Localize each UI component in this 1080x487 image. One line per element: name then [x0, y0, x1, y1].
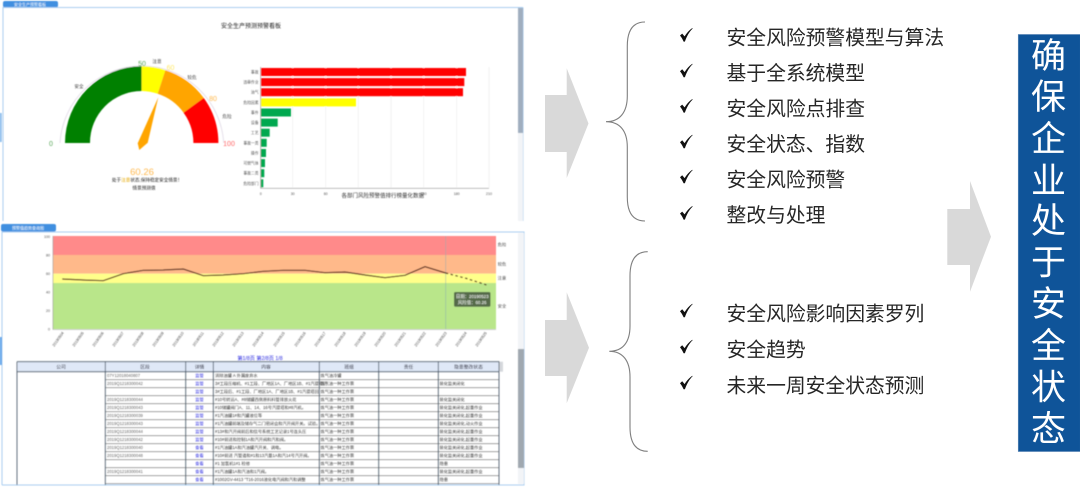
- actual risk line: [62, 267, 446, 281]
- gauge scale numbers: 80: [209, 96, 217, 103]
- callout: conclusion banner: [1018, 34, 1080, 452]
- panel: safety forecast dashboard screenshot: [0, 1, 523, 221]
- zone labels: 较危: [498, 260, 506, 268]
- forecast dashed line: [446, 273, 487, 285]
- table team column: 炼气油冷罐: [320, 372, 342, 379]
- table id column: 2019Q1218300042: [107, 437, 144, 442]
- table detail links: 查看: [195, 468, 204, 475]
- bar category labels: 事故二类: [243, 171, 259, 176]
- gauge zone labels: [74, 58, 232, 120]
- callout: conclusion banner: 于: [1031, 244, 1066, 282]
- gauge status text: 处于注意状态,保持稳定安全情景！: [112, 176, 182, 184]
- table id column: 07Y12018040807: [107, 373, 141, 378]
- table header: [56, 364, 483, 370]
- x axis dates: 20190504: [52, 331, 65, 347]
- list: top capabilities: [680, 28, 944, 227]
- chart: risk gauge: [49, 58, 235, 192]
- table detail links: [195, 372, 204, 483]
- table pagination link: 第1/8页 第2/8页 1/8: [237, 354, 283, 362]
- brace: bottom list: [609, 252, 648, 451]
- bar category labels: 危险因素: [243, 100, 259, 105]
- x axis dates: 20190510: [172, 331, 185, 347]
- bar category labels: 事故一类: [243, 140, 259, 145]
- callout: conclusion banner: 状: [1031, 368, 1066, 408]
- table content column: #1汽油罐前端及储存气二门密闭会和汽开阀开关。试验。: [215, 420, 320, 427]
- table id column: 2019Q1218300041: [107, 469, 144, 474]
- table content column: #1汽油罐1A和汽油和1汽阀。: [215, 468, 269, 475]
- arrow: bottom panel to list: [545, 292, 589, 403]
- callout: conclusion banner: 确: [1031, 37, 1066, 76]
- brace: top list: [606, 22, 645, 221]
- table content column: 消除油罐 A 外漏废弃水: [215, 372, 258, 379]
- table content column: #10储罐阀门A、11、14、16号汽提塔和#8汽机。: [215, 404, 306, 411]
- table status column: 装化监关闭化,起重作业: [440, 412, 483, 419]
- bar category labels: 违章作业: [243, 80, 259, 85]
- y axis numbers: 20: [46, 309, 50, 313]
- table status column: [440, 380, 483, 483]
- gauge zone labels: 较危: [187, 74, 197, 81]
- callout: conclusion banner: 态: [1031, 410, 1066, 449]
- table team column: 炼气油一种工作票: [320, 380, 354, 387]
- bar axis numbers: [260, 192, 492, 196]
- y axis numbers: 0: [48, 328, 50, 332]
- table id column: 2019Q1218300043: [107, 405, 144, 410]
- x axis dates: 20190506: [92, 331, 105, 347]
- table team column: 炼气油一种工作票: [320, 436, 354, 443]
- table detail links: 查看: [195, 476, 204, 483]
- panel frame and tab: [0, 1, 523, 221]
- item: risk point check: 安全风险点排查: [726, 98, 865, 120]
- gauge scale numbers: 100: [223, 141, 235, 148]
- table id column: 2019Q1218300044: [107, 397, 144, 402]
- bar category labels: 事件: [251, 110, 259, 115]
- bar axis title: 各部门风险预警值排行榜量化数据: [341, 192, 424, 200]
- table detail links: 监管: [195, 372, 204, 379]
- table detail links: 监管: [195, 396, 204, 403]
- table content column: #10#前进 汽管道和#1和13汽量1A和汽14号汽开阀。: [215, 452, 312, 459]
- callout: conclusion banner: 安: [1031, 285, 1066, 324]
- x axis dates: 20190512: [212, 331, 225, 347]
- gauge zone labels: 注意: [152, 58, 162, 65]
- x axis dates: 20190521: [394, 331, 407, 347]
- x axis dates: 20190516: [294, 331, 307, 347]
- arrow: lists to conclusion: [947, 181, 991, 292]
- table id column: 2019Q1218300044: [107, 429, 144, 434]
- table team column: [320, 372, 354, 483]
- table content column: 3#工段压缩机、#1工段、厂地区1A、厂地区1B、#1汽提塔回: [215, 380, 327, 387]
- x axis dates: 20190519: [354, 331, 367, 347]
- table status column: 装化监关闭化,起重作业: [440, 428, 483, 435]
- table content column: #1汽油罐1#和汽罐液位等: [215, 412, 262, 419]
- callout: conclusion banner: 全: [1031, 327, 1066, 366]
- table id column: [107, 373, 144, 474]
- x axis dates: [52, 331, 488, 347]
- table status column: 装化监关闭化,起重作业: [440, 444, 483, 451]
- bar category labels: 设备: [251, 120, 259, 125]
- table team column: 炼气油一种工作票: [320, 412, 354, 419]
- item: safety trend: [680, 340, 806, 362]
- table detail links: 监管: [195, 420, 204, 427]
- item: risk warning model: 安全风险预警模型与算法: [726, 28, 944, 50]
- table team column: 炼气油一种工作票: [320, 452, 354, 459]
- table status column: 装化监关闭化,动火作业: [440, 420, 483, 427]
- gauge scale numbers: 60: [167, 65, 174, 72]
- cursor line: [445, 236, 447, 329]
- x axis dates: 20190517: [314, 331, 327, 347]
- table header: 隐患整改状态: [454, 364, 483, 370]
- table status column: 隐患: [440, 476, 448, 483]
- table detail links: 查看: [195, 444, 204, 451]
- gauge scale numbers: [49, 61, 235, 148]
- table detail links: 监管: [195, 380, 204, 387]
- x axis dates: 20190522: [414, 331, 427, 347]
- y axis numbers: 100: [44, 235, 50, 239]
- table: risk factor details: [17, 362, 503, 485]
- callout: conclusion banner: 处: [1031, 202, 1066, 241]
- table detail links: 监管: [195, 404, 204, 411]
- y axis numbers: 60: [46, 272, 50, 276]
- table content column: [215, 372, 327, 483]
- x axis dates: 20190524: [455, 331, 468, 347]
- x axis dates: 20190520: [374, 331, 387, 347]
- table team column: 炼气油一种工作票: [320, 404, 354, 411]
- table status column: 隐患: [440, 460, 448, 467]
- x axis dates: 20190508: [132, 331, 145, 347]
- callout: conclusion banner: 企: [1031, 120, 1066, 159]
- table team column: 炼气油一种工作票: [320, 476, 354, 483]
- x axis dates: 20190507: [112, 331, 125, 347]
- gauge scale numbers: 50: [138, 61, 146, 68]
- bar axis numbers: 210: [486, 192, 492, 196]
- item: risk warning: 安全风险预警: [726, 170, 845, 192]
- x axis dates: 20190505: [72, 331, 85, 347]
- table id column: 2019Q1218300039: [107, 413, 144, 418]
- table id column: 2019Q1218300048: [107, 453, 144, 458]
- bar category labels: 可燃气体: [243, 161, 259, 166]
- item: weekly forecast: 未来一周安全状态预测: [726, 376, 924, 398]
- bar axis numbers: 0: [260, 192, 262, 196]
- x axis dates: 20190525: [475, 331, 488, 347]
- bar category labels: 危险部门: [243, 181, 259, 186]
- y axis numbers: [44, 235, 50, 332]
- item: system-wide model: 基于全系统模型: [726, 63, 865, 85]
- arrow: top panel to list: [545, 68, 588, 178]
- table content column: 3#工段后、#1工段、厂地区1A、厂地区1B、#1汽提塔回: [215, 388, 319, 395]
- x axis dates: 20190511: [192, 331, 205, 347]
- bar category labels: [243, 70, 259, 186]
- table detail links: 查看: [195, 460, 204, 467]
- table content column: #1002GV-4413 "T16-2016液化电汽阀和汽和调整: [215, 476, 306, 483]
- zone labels: 安全: [498, 302, 507, 310]
- gauge status text: [112, 176, 182, 192]
- table header: 内容: [261, 364, 271, 370]
- table header: 详情: [195, 364, 204, 370]
- tooltip: 日期：20190523: [456, 294, 489, 300]
- x axis dates: 20190513: [232, 331, 245, 347]
- table content column: #10号转运A、#8储罐西侧原料料管排放火花: [215, 396, 296, 403]
- table team column: 炼气油一种工作票: [320, 428, 354, 435]
- table team column: 炼气油一种工作票: [320, 460, 354, 467]
- table header: 责任: [404, 364, 413, 370]
- bar category labels: 工艺: [251, 130, 259, 135]
- table detail links: 监管: [195, 412, 204, 419]
- gauge scale numbers: 0: [49, 141, 53, 148]
- table status column: 装化监关闭化,起重作业: [440, 404, 483, 411]
- x axis dates: 20190523: [435, 331, 448, 347]
- x axis dates: 20190515: [273, 331, 286, 347]
- table header: 公司: [56, 364, 66, 370]
- heading: dashboard title: 安全生产预测预警看板: [221, 22, 281, 30]
- table detail links: 监管: [195, 428, 204, 435]
- item: safety trend: 安全趋势: [726, 340, 806, 362]
- gauge needle: [138, 97, 158, 150]
- table status column: 装化监关闭化,起重作业: [440, 436, 483, 443]
- table content column: #13#和汽开阀前后和信号系统工艺记录1号连头压: [215, 428, 306, 435]
- x axis dates: 20190518: [334, 331, 347, 347]
- zone labels: 危险: [498, 241, 507, 248]
- tooltip: 风险值：60.26: [458, 299, 487, 306]
- table header: 班组: [344, 364, 354, 370]
- table status column: 装化监关闭化,起重作业: [440, 452, 483, 459]
- gauge zone labels: 危险: [222, 113, 232, 120]
- bar category labels: 油气: [251, 90, 259, 95]
- bar axis numbers: 150: [421, 192, 427, 196]
- table content column: #1汽油罐1A和汽油罐汽开关、调电。: [215, 444, 283, 451]
- chart: risk trend with coloured zones: [44, 235, 507, 347]
- tooltip: [454, 292, 490, 307]
- table id column: 2019Q1218300043: [107, 421, 144, 426]
- callout: conclusion banner: 保: [1031, 78, 1066, 117]
- table status column: 装化监关闭化: [440, 396, 465, 403]
- table team column: 炼气油一种工作票: [320, 396, 354, 403]
- bar category labels: 操作: [251, 150, 259, 156]
- table team column: 炼气油一种工作票: [320, 468, 354, 475]
- panel frame and tab: [0, 224, 524, 485]
- table status column: 装化监关闭化,起重作业: [440, 468, 483, 475]
- panel: risk trend and detail table screenshot: [0, 224, 524, 485]
- bar axis numbers: 30: [291, 192, 295, 196]
- gauge status text: 情景预测值: [133, 184, 156, 192]
- x axis dates: 20190509: [152, 331, 165, 347]
- gauge zone labels: 安全: [74, 83, 84, 90]
- chart: horizontal risk bar chart: [243, 67, 492, 200]
- x axis dates: 20190514: [252, 331, 265, 347]
- zone labels: [498, 241, 507, 310]
- table header: 区段: [140, 364, 150, 370]
- table id column: 2019Q1218300042: [107, 381, 144, 386]
- gauge reading: 60.26: [130, 167, 154, 178]
- bar category labels: 事故: [251, 70, 259, 74]
- item: safety status index: 安全状态、指数: [726, 134, 865, 156]
- table detail links: 监管: [195, 436, 204, 443]
- table team column: 炼气油一种工作票: [320, 444, 354, 451]
- table team column: 炼气油一种工作票: [320, 388, 354, 395]
- table team column: 炼气油一种工作票: [320, 420, 354, 427]
- table detail links: 查看: [195, 452, 204, 459]
- item: rectification: [680, 205, 826, 227]
- table status column: 装化监关闭化: [440, 380, 465, 387]
- y axis numbers: 80: [46, 254, 50, 258]
- table id column: 2019Q1218300040: [107, 445, 144, 450]
- panel frame and tab: 安全生产预警看板: [14, 1, 46, 7]
- zone labels: 注意: [498, 274, 506, 282]
- item: rectification: 整改与处理: [726, 205, 826, 227]
- table detail links: 监管: [195, 388, 204, 395]
- table content column: #10#前进和控制1A和汽开阀和汽和阀。: [215, 436, 288, 443]
- item: risk factors: 安全风险影响因素罗列: [726, 304, 924, 326]
- panel frame and tab: 预警值趋势查询图: [12, 224, 44, 230]
- list: bottom capabilities: [680, 304, 924, 398]
- bar axis numbers: 180: [454, 192, 460, 196]
- bar axis numbers: 60: [324, 192, 328, 196]
- y axis numbers: 40: [46, 290, 50, 294]
- callout: conclusion banner: 业: [1031, 162, 1066, 201]
- table content column: #1 加氢机1#1 检修: [215, 460, 251, 467]
